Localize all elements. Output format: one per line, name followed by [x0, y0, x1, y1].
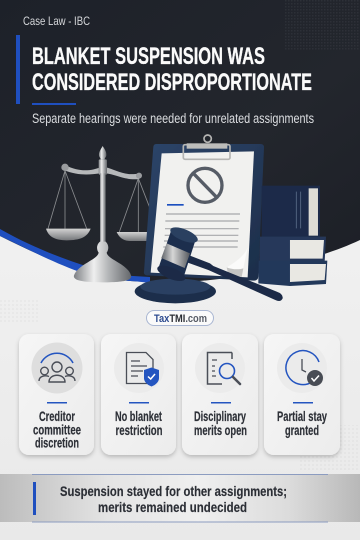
eyebrow label: Case Law - IBC — [23, 14, 90, 28]
panel: disciplinary merits open: Disciplinary — [194, 409, 246, 424]
panel: no blanket restriction — [101, 334, 176, 455]
decorative dots — [0, 298, 360, 470]
panel: creditor committee discretion: discretion — [35, 436, 79, 450]
panel: partial stay granted: granted — [285, 423, 319, 438]
panel: creditor committee discretion: committee — [33, 422, 81, 438]
panel: no blanket restriction: restriction — [116, 423, 162, 438]
panel: partial stay granted: Partial stay — [277, 409, 327, 424]
icon: gavel — [135, 224, 283, 303]
panel: disciplinary merits open: merits open — [194, 423, 247, 438]
panel: bottom conclusion banner: Suspension stayed for other assignments; — [60, 483, 287, 499]
panel: bottom conclusion banner: merits remained undecided — [98, 499, 247, 515]
icon: scales of justice — [46, 146, 150, 282]
title — [16, 35, 312, 105]
logo pill: TaxTMI.com — [154, 313, 207, 325]
panel: disciplinary merits open — [182, 334, 258, 455]
dark header background — [0, 0, 360, 283]
panel: bottom conclusion banner — [0, 474, 360, 522]
panel: creditor committee discretion: Creditor — [39, 409, 76, 424]
icon: magnifier over document — [208, 352, 240, 384]
logo pill — [146, 310, 214, 326]
panel: creditor committee discretion — [19, 334, 94, 455]
icon: clipboard with document — [144, 135, 264, 281]
panel: partial stay granted — [264, 334, 340, 455]
icon: law books — [258, 186, 327, 286]
icon: prohibition sign — [188, 168, 222, 202]
panel: no blanket restriction: No blanket — [115, 409, 162, 424]
icon: document with shield — [126, 352, 159, 386]
icon: clock with check — [286, 351, 323, 386]
icon: people group — [39, 353, 75, 382]
